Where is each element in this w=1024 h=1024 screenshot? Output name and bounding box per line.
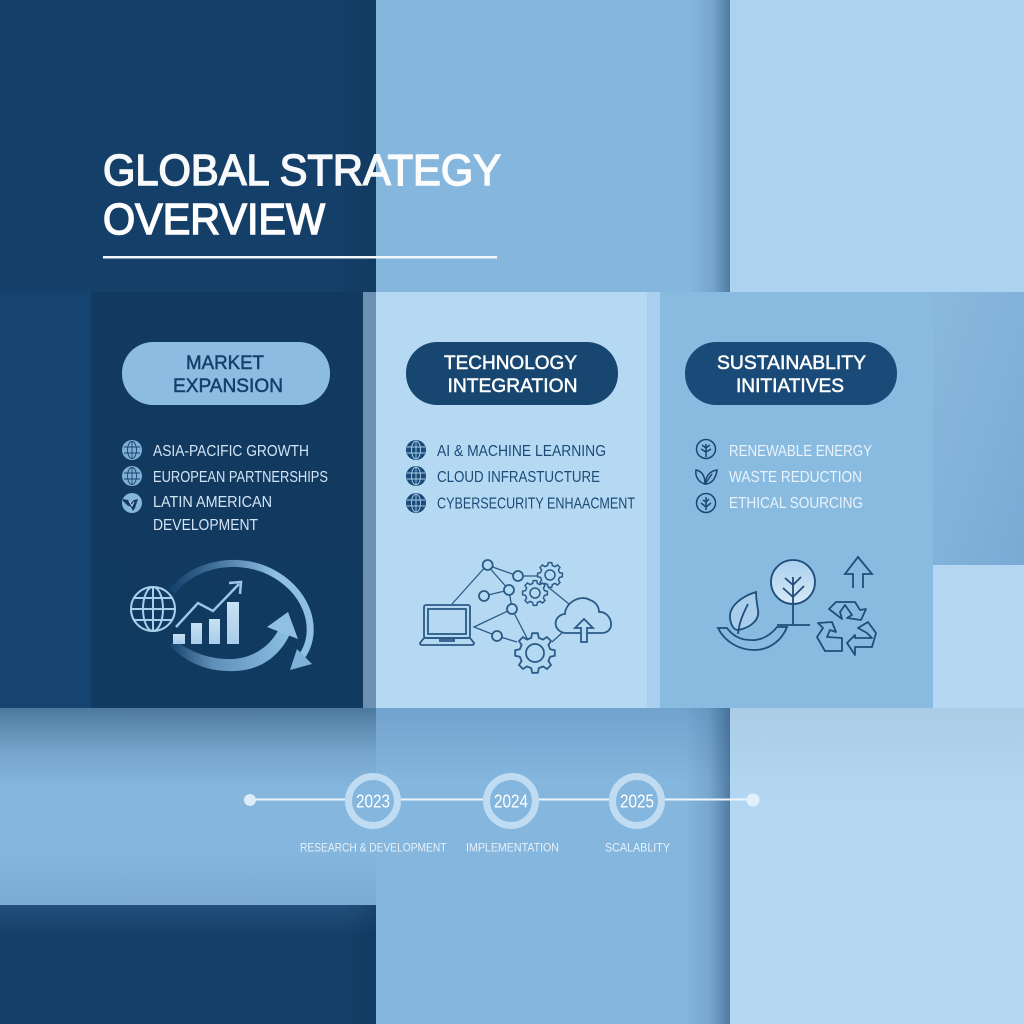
heading pill: market expansion: EXPANSION [173,375,283,397]
leaf [730,592,758,630]
list: market expansion: DEVELOPMENT [153,517,258,534]
milestone 2024 [466,776,559,854]
timeline start dot [244,794,256,806]
tree [771,560,815,604]
recycling arrows [817,602,876,655]
list: market expansion [153,443,328,534]
heading pill: market expansion: MARKET [186,352,264,374]
list: market expansion: EUROPEAN PARTNERSHIPS [153,469,328,486]
illustration: technology network [420,560,611,673]
panel: technology integration [376,292,660,708]
title: OVERVIEW [103,195,325,244]
heading pill: market expansion [122,342,330,405]
heading pill: sustainability initiatives: INITIATIVES [736,375,844,397]
heading pill: sustainability initiatives: SUSTAINABLITY [717,352,866,374]
list: market expansion: LATIN AMERICAN [153,494,272,511]
trend line [176,582,241,627]
heading pill: sustainability initiatives [685,342,897,405]
timeline end dot [746,794,760,806]
icon: globe bullet [406,466,426,486]
list: technology integration: CLOUD INFRASTUCTURE [437,469,600,486]
illustration: sustainability [718,557,876,655]
list: sustainability initiatives: WASTE REDUCTION [729,469,862,486]
list: technology integration: CYBERSECURITY ENHAACMENT [437,496,635,512]
icon: plant in circle [696,440,716,458]
list: technology integration [437,443,635,512]
laptop [420,605,474,645]
icon: globe bullet [406,440,426,460]
list: sustainability initiatives: ETHICAL SOURCING [729,495,863,512]
list: technology integration: AI & MACHINE LEARNING [437,443,606,460]
orbit arc [172,563,310,660]
icon: globe bullet [122,440,142,460]
title underline [103,256,497,258]
list: market expansion: ASIA-PACIFIC GROWTH [153,443,309,460]
list: sustainability initiatives [729,443,872,512]
timeline [244,776,760,854]
milestone 2025: SCALABLITY [605,840,670,854]
up arrow [845,557,872,588]
globe [131,587,175,631]
icon: americas bullet [122,493,142,513]
icon: globe bullet [406,493,426,513]
icon: twin leaves [696,470,717,484]
cloud upload [556,598,611,642]
icon: globe bullet [122,466,142,486]
bars [173,602,239,644]
panel: market expansion [91,292,376,708]
milestone 2025 [605,776,670,854]
cradle crescent [718,627,787,650]
milestone 2025: 2025 [620,790,654,812]
heading pill: technology integration: INTEGRATION [448,375,578,397]
title: GLOBAL STRATEGY [103,146,501,195]
heading pill: technology integration: TECHNOLOGY [444,352,577,374]
timeline axis [250,798,753,800]
icon: sprout in circle [696,494,716,512]
milestone 2023: RESEARCH & DEVELOPMENT [300,840,447,854]
milestone 2023: 2023 [356,790,390,812]
nodes [479,560,523,641]
swoosh [170,629,290,671]
title [103,146,501,244]
heading pill: technology integration [406,342,618,405]
panel: sustainability initiatives [660,292,933,708]
illustration: global growth [131,563,312,671]
milestone 2024: 2024 [494,790,528,812]
arrowhead up [267,612,298,639]
gears [515,563,562,673]
milestone 2023 [300,776,447,854]
list: sustainability initiatives: RENEWABLE ENERGY [729,443,872,460]
connectors [452,565,569,642]
arrowhead down [290,649,312,670]
milestone 2024: IMPLEMENTATION [466,840,559,854]
